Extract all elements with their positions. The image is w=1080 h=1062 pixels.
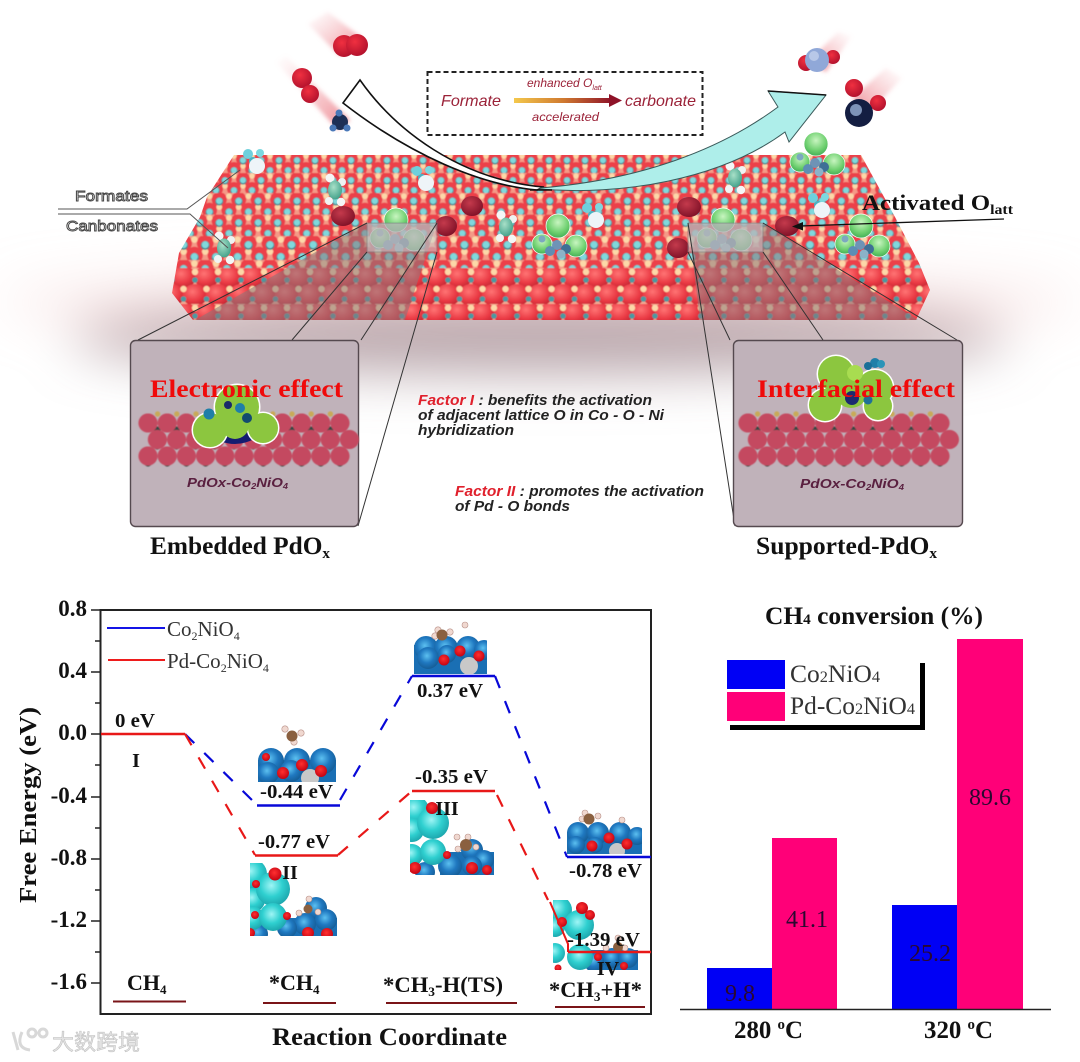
text: watermark: 大数跨境	[52, 1030, 140, 1055]
PdOx clusters on surface	[370, 132, 890, 258]
chart title: CH4 conversion (%)	[765, 603, 983, 630]
legend: NiO	[198, 617, 234, 641]
chart: CH4 conversion bars	[680, 603, 1051, 1044]
y axis labels: -0.4	[51, 783, 87, 808]
label: Carbonates	[58, 214, 228, 248]
reaction coordinate labels: *CH	[549, 977, 593, 1002]
callout: formate to carbonate	[428, 72, 702, 135]
state markers: I	[132, 750, 140, 772]
reaction coordinate labels: 4	[313, 982, 320, 997]
activated lattice oxygen sites	[331, 196, 799, 258]
energy labels: 0 eV	[115, 710, 155, 732]
series: Co2NiO4 profile	[185, 676, 651, 857]
reaction coordinate labels: CH	[127, 970, 160, 995]
watermark	[13, 1029, 140, 1055]
label: PdOx-Co2NiO4: 4	[282, 482, 289, 491]
text block: Factor I: Factor I : benefits the activation	[418, 393, 652, 409]
label: Formates: Formates	[75, 188, 148, 205]
energy labels	[115, 680, 642, 951]
text block: Factor II	[455, 484, 704, 515]
caption: Supported-PdOx: x	[929, 546, 938, 562]
label: Activated O latt with pointer: Activated O	[862, 190, 975, 215]
reaction coordinate labels: -H(TS)	[435, 972, 503, 997]
panel: supported PdOx	[734, 340, 962, 526]
y axis labels: 0.8	[58, 596, 87, 621]
label: PdOx-Co2NiO4: NiO	[871, 476, 899, 491]
bar values: 89.6	[969, 785, 1011, 811]
legend	[727, 660, 922, 728]
reaction coordinate labels	[113, 970, 645, 1007]
catalyst slab lattice	[172, 155, 930, 320]
label: PdOx-Co2NiO4: NiO	[256, 475, 283, 490]
curved reaction arrow	[343, 80, 826, 191]
text block: Factor II: Factor II : promotes the activation	[455, 484, 704, 500]
label: PdOx-Co2NiO4: PdOx-Co	[187, 475, 243, 490]
x labels: 280	[734, 1017, 772, 1044]
label: Activated O latt with pointer: latt	[990, 203, 1013, 218]
legend: 4	[263, 661, 269, 675]
structure: Co2NiO4 *CH3+H*	[567, 810, 642, 854]
series: Pd-Co2NiO4 profile	[101, 734, 651, 952]
text block: Factor I: of adjacent lattice O in Co - O - Ni	[418, 408, 665, 424]
state markers	[132, 750, 620, 980]
x labels: C	[975, 1017, 993, 1044]
y axis labels: 0.4	[58, 658, 88, 683]
legend: NiO	[227, 649, 263, 673]
y axis ticks	[91, 610, 100, 983]
reaction coordinate labels: *CH	[383, 972, 427, 997]
legend: Co2NiO4	[790, 661, 880, 688]
lattice	[138, 411, 359, 467]
label: Carbonates: Canbonates	[66, 218, 158, 235]
slab shadow	[0, 270, 1080, 374]
label: enhanced O latt: latt	[592, 85, 603, 92]
legend: 2	[192, 629, 198, 643]
x labels: o	[968, 1017, 975, 1033]
x labels	[734, 1017, 993, 1044]
text block: Factor I	[418, 393, 665, 439]
x axis title: Reaction Coordinate	[272, 1022, 507, 1051]
y axis labels: -1.2	[51, 907, 87, 932]
energy labels: 0.37 eV	[417, 680, 483, 702]
energy labels: -0.44 eV	[260, 781, 333, 803]
legend: 2	[221, 661, 227, 675]
icon: watermark logo	[13, 1029, 47, 1050]
x labels: 320	[924, 1017, 962, 1044]
structure: Pd-Co2NiO4 *CH4	[250, 863, 337, 936]
label: enhanced O latt: enhanced O	[527, 76, 592, 90]
energy labels: -0.77 eV	[258, 831, 330, 853]
label: Activated O latt with pointer	[792, 190, 1013, 230]
x labels: o	[778, 1017, 785, 1033]
reaction coordinate labels: *CH	[269, 970, 313, 995]
bars: 320 C	[892, 639, 1023, 1009]
caption: Embedded PdOx: x	[322, 546, 331, 562]
PdOx cluster embedded	[192, 384, 280, 448]
icon: CO2 product outgoing	[845, 68, 902, 127]
bars: 280 C	[707, 838, 837, 1009]
label: PdOx-Co2NiO4: 2	[250, 482, 257, 491]
energy labels: -0.78 eV	[569, 860, 642, 882]
caption: Embedded PdOx: Embedded PdO	[150, 533, 320, 560]
label: PdOx-Co2NiO4: 2	[865, 483, 872, 492]
y axis labels: -0.8	[51, 845, 87, 870]
surface formate and carbonate molecules	[214, 149, 830, 264]
chart: free energy diagram	[16, 596, 651, 1051]
state markers: IV	[597, 958, 620, 980]
caption: Supported-PdOx: Supported-PdO	[756, 533, 925, 560]
icon: O2 molecule incoming	[308, 12, 368, 57]
y axis labels: 0.0	[58, 720, 87, 745]
bar values: 9.8	[725, 981, 755, 1007]
heading: Interfacial effect: Interfacial effect	[757, 376, 956, 403]
arrow: gradient	[514, 94, 622, 107]
bar values: 41.1	[786, 907, 828, 933]
structure: Co2NiO4 *CH4	[257, 726, 336, 787]
legend	[107, 617, 269, 675]
reaction coordinate labels: 4	[160, 982, 167, 997]
legend: Pd-Co2NiO4	[790, 693, 915, 720]
y axis title: Free Energy (eV)	[16, 707, 42, 903]
heading: Electronic effect: Electronic effect	[150, 376, 344, 403]
label: PdOx-Co2NiO4: 4	[898, 483, 905, 492]
reaction coordinate labels: 3	[594, 989, 601, 1004]
lattice	[738, 411, 959, 467]
reaction coordinate labels: +H*	[601, 977, 642, 1002]
y axis labels: -1.6	[51, 969, 87, 994]
state markers: II	[282, 862, 298, 884]
zoom projection: supported	[688, 223, 957, 526]
text block: Factor II: of Pd - O bonds	[455, 499, 570, 515]
label: accelerated: accelerated	[532, 110, 599, 124]
energy labels: -0.35 eV	[415, 766, 488, 788]
legend: Co	[167, 617, 192, 641]
icon: CH4 and O2 incoming	[276, 56, 350, 132]
text block: Factor I: hybridization	[418, 423, 514, 439]
y axis labels	[51, 596, 88, 994]
PdOx cluster supported	[808, 354, 894, 422]
icon: CO product outgoing	[798, 32, 852, 72]
axis line	[680, 1008, 1051, 1010]
legend: 4	[234, 629, 240, 643]
panel: catalyst reaction scheme	[0, 12, 1080, 562]
zoom projection: embedded	[138, 223, 437, 526]
label: PdOx-Co2NiO4: PdOx-Co	[800, 476, 856, 491]
bar values	[725, 785, 1011, 1007]
structure: Co2NiO4 TS	[414, 622, 494, 675]
energy labels: -1.39 eV	[567, 929, 640, 951]
structure: Pd-Co2NiO4 TS	[410, 800, 494, 875]
label: carbonate: carbonate	[625, 93, 696, 110]
label: Formates	[58, 170, 240, 209]
legend: Pd-Co	[167, 649, 221, 673]
structure: Pd-Co2NiO4 *CH3+H*	[553, 900, 638, 970]
x labels: C	[785, 1017, 803, 1044]
bar values: 25.2	[909, 941, 951, 967]
panel: embedded PdOx	[130, 340, 359, 526]
label: Formate: Formate	[441, 93, 501, 110]
reaction coordinate labels: 3	[428, 984, 436, 999]
axis frame	[100, 610, 651, 1014]
state markers: III	[435, 798, 459, 820]
